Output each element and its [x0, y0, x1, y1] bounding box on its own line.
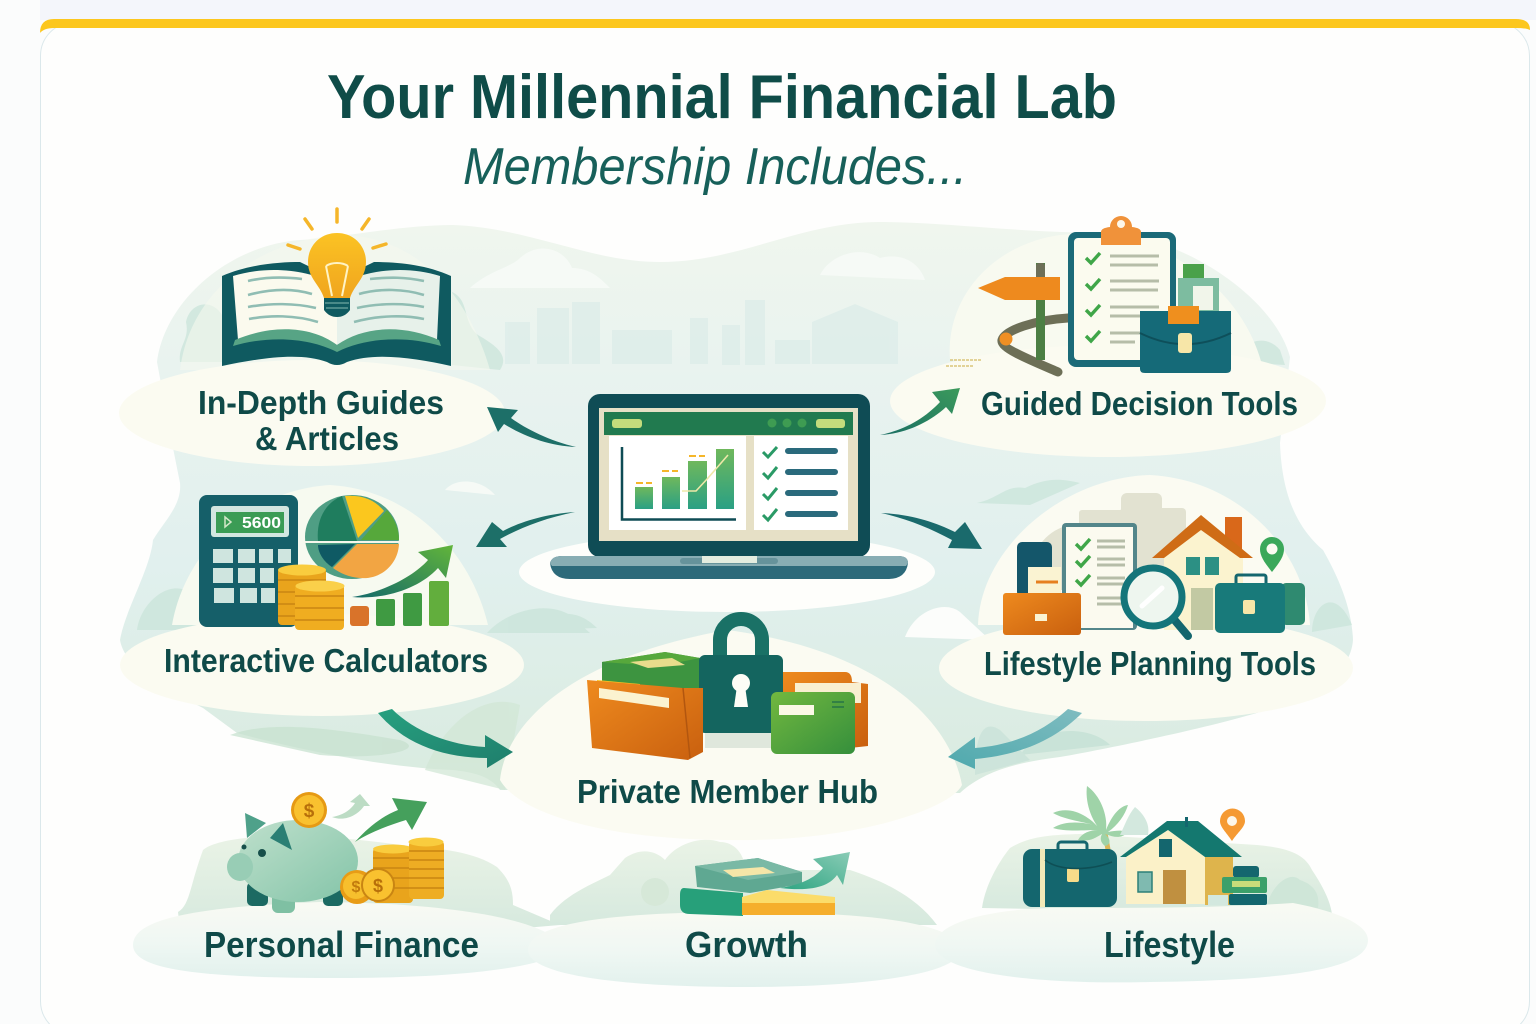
icon: road signpost [978, 263, 1068, 372]
icon: coin stacks [278, 564, 344, 630]
icon: coin stacks [340, 838, 444, 904]
hill [982, 834, 1332, 914]
icon: piggy bank: $ [304, 801, 315, 822]
panel: laptop platform [519, 532, 935, 612]
icon: orange folder right [783, 672, 868, 748]
yellow top bar [40, 19, 1530, 33]
icon: coin stacks: $ [352, 879, 361, 896]
bushes [137, 292, 1352, 790]
icon: piggy bank [227, 792, 370, 913]
icon: house [1120, 817, 1242, 905]
top strip [40, 0, 1536, 20]
icon: location pin [1220, 808, 1245, 841]
panel: In-Depth Guides & Articles [119, 209, 505, 466]
label text: Growth [685, 924, 808, 965]
label pill [120, 614, 524, 716]
hill with trees [550, 840, 937, 925]
icon: books [680, 858, 835, 916]
icon: open book with light bulb [222, 209, 451, 366]
icon: green money box [602, 652, 700, 692]
icon: ghost bags behind [1033, 493, 1186, 590]
arrow: laptop to guides [487, 407, 576, 447]
background landscape wash [120, 222, 1353, 793]
bulb [288, 209, 386, 317]
bezel [588, 394, 870, 557]
panel: Growth [528, 840, 960, 987]
panel: Private Member Hub [500, 619, 962, 840]
checklist panel [754, 436, 848, 530]
subtitle: Membership Includes... [463, 138, 967, 196]
icon: calculator: 5600 [242, 515, 281, 532]
mound [500, 630, 962, 840]
label text: In-Depth Guides [198, 384, 444, 421]
mound [950, 234, 1262, 365]
mound [180, 235, 490, 370]
icon: growth arrow [355, 798, 427, 842]
panel: Interactive Calculators [120, 485, 524, 716]
clouds [445, 249, 990, 640]
arrow: laptop to calculators [476, 512, 575, 547]
label text: Guided Decision Tools [981, 385, 1298, 422]
icon: arrow [780, 852, 850, 889]
icon: clipboard checklist [1068, 216, 1176, 367]
icon: folder and case [1003, 542, 1081, 635]
label pill [528, 912, 960, 987]
label text: Private Member Hub [577, 773, 878, 810]
label text: Lifestyle [1104, 924, 1235, 965]
label text: Lifestyle Planning Tools [984, 645, 1316, 682]
title: Your Millennial Financial Lab [327, 63, 1117, 132]
icon: briefcase [1140, 264, 1231, 373]
icon: orange folder left [587, 680, 703, 760]
label pill [935, 903, 1368, 982]
arrow: calculators to member hub [378, 709, 513, 768]
screen [599, 408, 858, 541]
icon: briefcase [1215, 575, 1305, 633]
label text: Personal Finance [204, 924, 479, 965]
icon: pie chart [305, 495, 400, 579]
icon: magnifying glass [1124, 568, 1188, 636]
decorative note dashes [946, 360, 982, 366]
arrow: laptop to decision tools [880, 388, 960, 435]
bar chart panel [609, 436, 746, 530]
panel: Guided Decision Tools [890, 216, 1326, 457]
icon: clipboard [1062, 523, 1137, 630]
label text: Interactive Calculators [164, 642, 488, 679]
icon: green folder [771, 692, 855, 754]
icon: coin stacks: $ [373, 876, 383, 896]
icon: growth bars and arrow [350, 545, 453, 626]
laptop [550, 394, 908, 579]
skyline [505, 300, 898, 365]
header bar [604, 412, 853, 435]
panel: Personal Finance [133, 792, 560, 978]
label pill [939, 615, 1353, 721]
arrow: lifestyle tools to member hub [948, 709, 1082, 769]
label text line 2: & Articles [255, 420, 399, 457]
bushes [1267, 877, 1318, 908]
icon: calculator [199, 495, 298, 627]
icon: location pin [1260, 537, 1284, 572]
mound [978, 475, 1310, 625]
icon: small bags [1208, 866, 1267, 905]
icon: padlock [699, 619, 783, 748]
panel: Lifestyle [935, 786, 1368, 982]
icon: palm tree [1053, 786, 1148, 855]
hill [178, 836, 560, 930]
label pill [119, 360, 505, 466]
icon: suitcase [1023, 842, 1117, 907]
arrow: laptop to lifestyle tools [881, 513, 982, 549]
icon: house [1152, 515, 1253, 630]
label pill [890, 345, 1326, 457]
label pill [133, 902, 560, 978]
panel: Lifestyle Planning Tools [939, 475, 1353, 721]
mound [172, 485, 488, 625]
laptop base [550, 556, 908, 579]
